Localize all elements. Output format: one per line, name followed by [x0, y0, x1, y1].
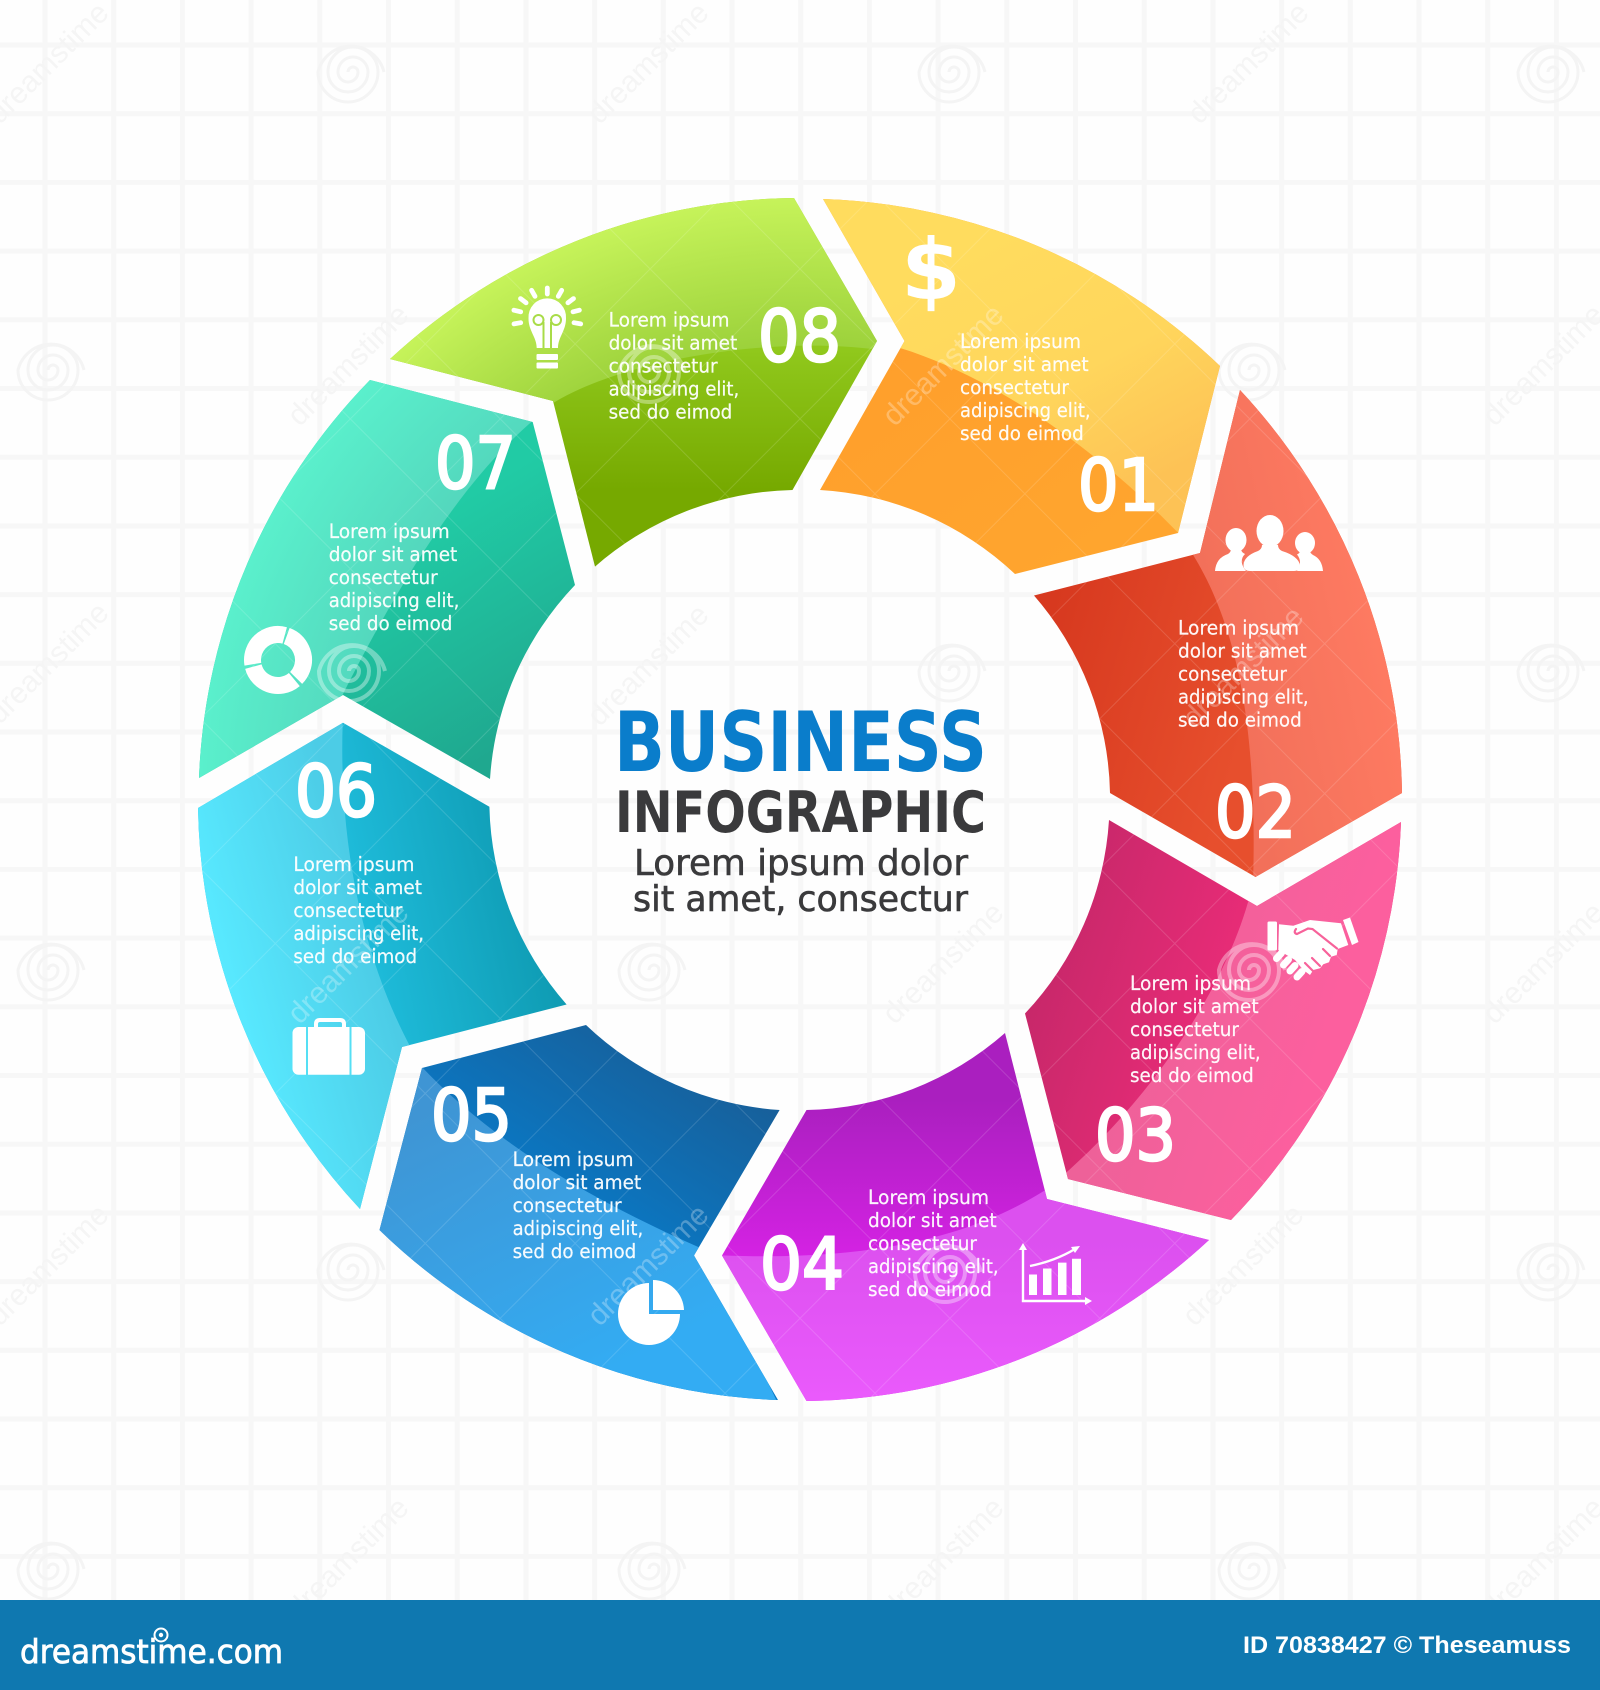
- watermark layer on segments: dreamstime: [876, 298, 1010, 432]
- title: business infographic: [614, 694, 987, 920]
- text: segment 03: adipiscing elit,: [1130, 1041, 1261, 1064]
- text: segment 07: Lorem ipsum: [329, 520, 450, 543]
- text: segment 08: consectetur: [609, 354, 719, 377]
- text: segment 06: consectetur: [293, 899, 403, 922]
- text: segment 05: adipiscing elit,: [513, 1217, 643, 1240]
- panel: segment 05 blue: [380, 1025, 780, 1400]
- heading: business: BUSINESS: [614, 694, 987, 791]
- text: segment 06: dolor sit amet: [293, 876, 422, 899]
- text: segment 04: sed do eimod: [868, 1278, 992, 1301]
- number 02: 02: [1215, 771, 1296, 854]
- text: segment 01: adipiscing elit,: [960, 399, 1091, 422]
- panel: segment 01 orange: [820, 199, 1220, 574]
- text: segment 05: sed do eimod: [513, 1240, 636, 1263]
- icon: bar chart: [1019, 1243, 1092, 1305]
- text: segment 03: consectetur: [1130, 1018, 1240, 1041]
- text: segment 01: dolor sit amet: [960, 353, 1089, 376]
- panel: segment 02 red: [1034, 390, 1402, 877]
- text: segment 07: sed do eimod: [329, 612, 452, 635]
- text: segment 07: [329, 520, 459, 635]
- number 05: 05: [431, 1074, 512, 1157]
- text: segment 08: adipiscing elit,: [609, 377, 739, 400]
- watermark layer on segments: dreamstime: [581, 1198, 715, 1332]
- number 03: 03: [1095, 1094, 1176, 1177]
- text: segment 08: [609, 308, 739, 423]
- subtitle: Lorem ipsum dolor: [634, 843, 968, 884]
- text: segment 03: dolor sit amet: [1130, 995, 1259, 1018]
- panel: segment 04 purple: [722, 1033, 1209, 1401]
- watermark layer on background: dreamstime: [581, 598, 715, 732]
- panel: segment 08 green: [390, 198, 877, 566]
- text: segment 03: Lorem ipsum: [1130, 972, 1251, 995]
- image id credit: ID 70838427 © Theseamuss: [1243, 1632, 1571, 1659]
- panel: segment 03 pink: [1025, 820, 1401, 1220]
- footer bar: [0, 1600, 1600, 1690]
- watermark layer on segments: dreamstime: [281, 896, 415, 1030]
- number 08: 08: [758, 295, 841, 378]
- text: segment 03: sed do eimod: [1130, 1064, 1254, 1087]
- text: segment 02: dolor sit amet: [1178, 640, 1307, 662]
- text: segment 06: adipiscing elit,: [293, 922, 424, 945]
- text: segment 02: adipiscing elit,: [1178, 686, 1309, 708]
- logo: dreamstime.com: dreamstime.com: [20, 1632, 283, 1671]
- text: segment 02: consectetur: [1178, 662, 1288, 686]
- text: segment 04: [868, 1186, 999, 1301]
- icon: cycle arrows: [245, 627, 311, 693]
- watermark layer on background: dreamstime: [876, 1491, 1010, 1625]
- text: segment 05: [513, 1148, 643, 1263]
- text: segment 06: sed do eimod: [293, 945, 417, 968]
- panel: segment 07 teal: [199, 380, 575, 779]
- heading: infographic: INFOGRAPHIC: [615, 780, 986, 846]
- text: segment 04: dolor sit amet: [868, 1209, 997, 1232]
- icon: briefcase: [292, 1020, 365, 1075]
- icon: dollar: $: [901, 221, 961, 319]
- watermark layer on background: dreamstime: [581, 0, 715, 130]
- text: segment 02: sed do eimod: [1178, 708, 1302, 732]
- text: segment 08: Lorem ipsum: [609, 308, 730, 331]
- text: segment 04: Lorem ipsum: [868, 1186, 989, 1209]
- number 04: 04: [760, 1223, 844, 1306]
- text: segment 07: dolor sit amet: [329, 543, 458, 566]
- watermark layer on background: dreamstime: [281, 1491, 415, 1625]
- subtitle: [633, 843, 968, 920]
- subtitle: sit amet, consectur: [633, 879, 968, 920]
- watermark layer on segments: dreamstime: [1176, 600, 1310, 734]
- watermark layer on background: dreamstime: [1181, 0, 1315, 130]
- text: segment 08: dolor sit amet: [609, 331, 738, 354]
- text: segment 03: [1130, 972, 1261, 1087]
- text: segment 08: sed do eimod: [609, 400, 732, 423]
- icon: people: [1215, 515, 1323, 571]
- text: segment 01: consectetur: [960, 376, 1070, 399]
- text: segment 07: adipiscing elit,: [329, 589, 459, 612]
- text: segment 07: consectetur: [329, 566, 439, 589]
- watermark layer on background: dreamstime: [876, 896, 1010, 1030]
- text: segment 04: adipiscing elit,: [868, 1255, 999, 1278]
- text: segment 01: [960, 330, 1091, 445]
- text: segment 05: consectetur: [513, 1194, 623, 1217]
- icon: light bulb: [514, 288, 581, 368]
- text: segment 05: dolor sit amet: [513, 1171, 642, 1194]
- text: segment 05: Lorem ipsum: [513, 1148, 634, 1171]
- text: segment 01: Lorem ipsum: [960, 330, 1081, 353]
- text: segment 02: [1178, 616, 1309, 732]
- icon: handshake: [1268, 918, 1358, 977]
- number 01: 01: [1078, 444, 1159, 527]
- text: segment 02: Lorem ipsum: [1178, 616, 1299, 640]
- number 06: 06: [295, 750, 377, 833]
- text: segment 04: consectetur: [868, 1232, 978, 1255]
- text: segment 01: sed do eimod: [960, 422, 1084, 445]
- text: segment 06: Lorem ipsum: [293, 853, 414, 876]
- text: segment 06: [293, 853, 424, 968]
- number 07: 07: [435, 422, 516, 505]
- watermark layer on background: dreamstime: [281, 298, 415, 432]
- icon: pie chart: [618, 1280, 684, 1345]
- panel: segment 06 cyan: [198, 722, 566, 1209]
- watermark layer on background: dreamstime: [1176, 1198, 1310, 1332]
- watermark layer on segments: [281, 298, 1310, 1332]
